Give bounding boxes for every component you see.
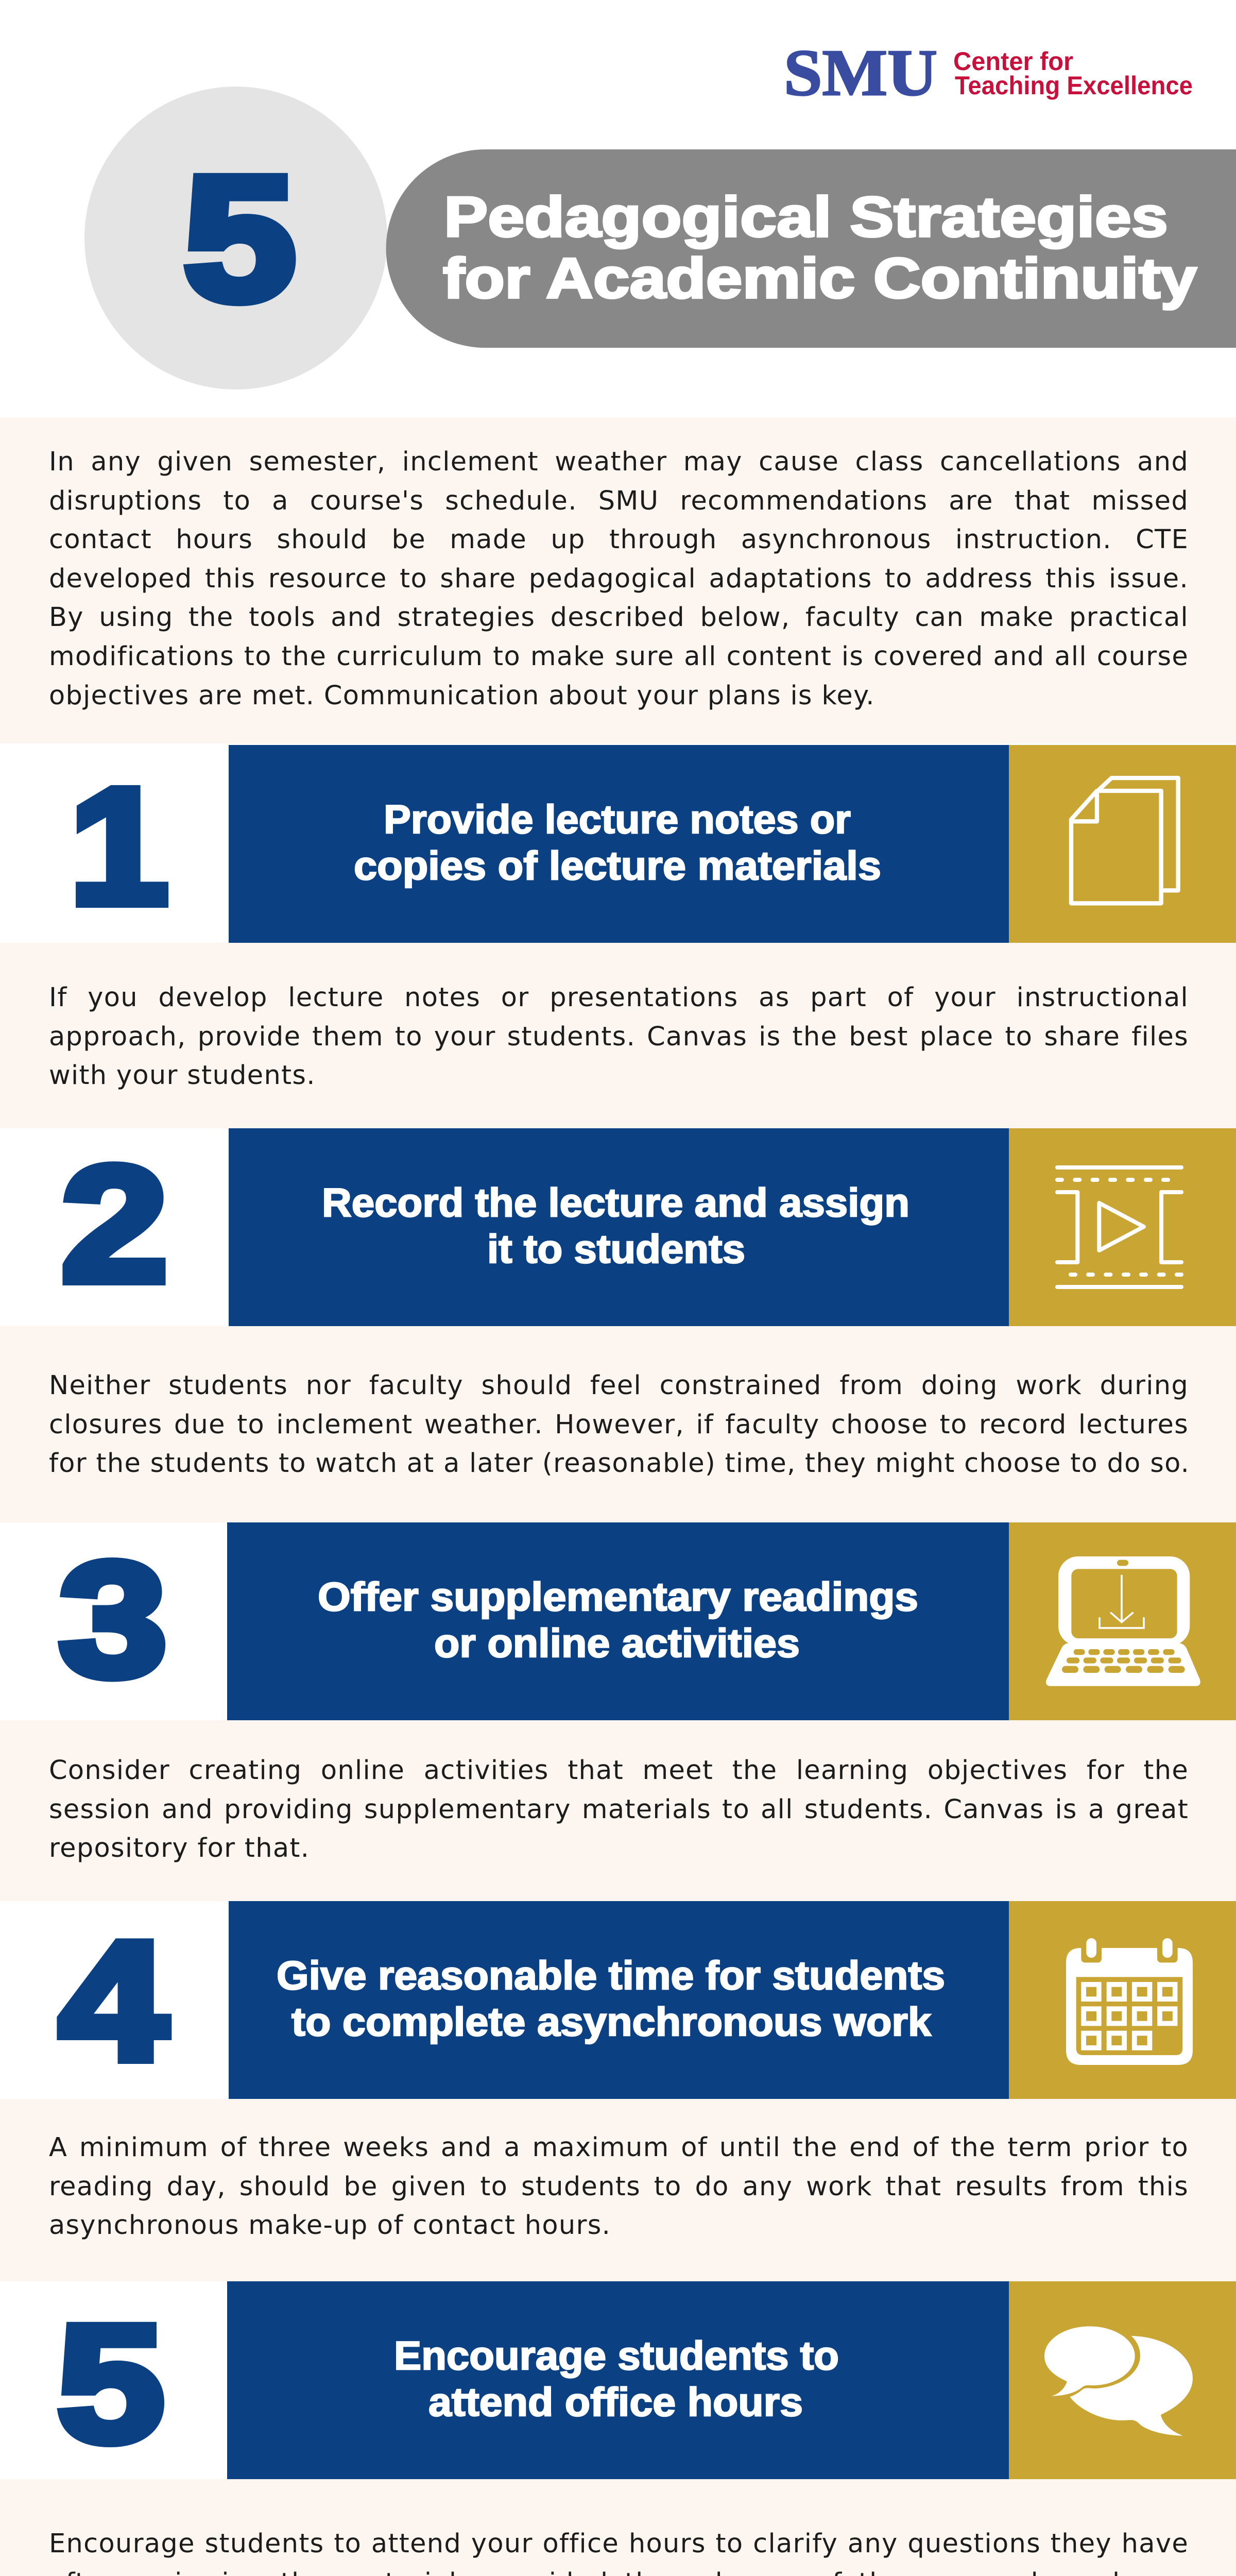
panel: strategy 5 text: Encourage students to attend your office hours to clarify any questions they have [49,2529,1189,2559]
icon: calendar [1066,1938,1193,2065]
panel: strategy 1 text: If you develop lecture notes or presentations as part of your instructional [49,982,1189,1013]
heading 3 [318,1574,918,1666]
panel: strategy 1 text: approach, provide them to your students. Canvas is the best place to share files [49,1022,1189,1052]
panel: strategy 2 text: closures due to inclement weather. However, if faculty choose to record lectures [49,1410,1189,1440]
panel: strategy 5 text [0,2479,1236,2576]
intro text: disruptions to a course's schedule. SMU recommendations are that missed [49,486,1189,516]
number 4: 4 [59,1906,168,2095]
heading 2 [322,1180,909,1272]
panel: strategy 2 text: Neither students nor faculty should feel constrained from doing work during [49,1370,1189,1401]
heading 4 [277,1953,945,2044]
heading 2: Record the lecture and assign [322,1180,909,1225]
heading 1 [354,796,881,888]
heading 3: or online activities [434,1620,800,1666]
heading 4: Give reasonable time for students [277,1953,945,1998]
panel: strategy 1 text: with your students. [49,1060,316,1091]
heading 5: Encourage students to [394,2333,839,2378]
logo: SMU Center for Teaching Excellence [784,36,1193,109]
panel: strategy 4 text [0,2099,1236,2281]
header [84,36,1236,389]
number circle: 5 [184,140,296,337]
panel: introduction [0,417,1236,743]
panel: strategy 3 text: Consider creating online activities that meet the learning objectives for the [49,1755,1189,1786]
title pill [386,149,1236,348]
strategy 2 header [61,1128,1236,1326]
panel: strategy 2 text [0,1326,1236,1522]
number 3: 3 [59,1529,167,1710]
logo: SMU Center for Teaching Excellence: Center for [953,47,1073,76]
heading 1: copies of lecture materials [354,843,881,888]
heading 3: Offer supplementary readings [318,1574,918,1619]
panel: strategy 4 text: reading day, should be given to students to do any work that results from this [49,2172,1189,2202]
panel: strategy 3 text [0,1720,1236,1901]
panel: strategy 4 text: asynchronous make-up of contact hours. [49,2210,611,2241]
panel: strategy 3 text: repository for that. [49,1833,310,1863]
heading 5: attend office hours [428,2379,803,2425]
panel: strategy 1 text [0,943,1236,1128]
title pill: Pedagogical Strategies [444,185,1168,249]
heading 1: Provide lecture notes or [384,796,851,842]
strategy 1 header [70,745,1236,943]
logo: SMU Center for Teaching Excellence: SMU [784,36,937,109]
panel: strategy 3 text: session and providing supplementary materials to all students. Canvas is a great [49,1794,1189,1825]
intro text [49,447,1189,711]
strategy 3 header [58,1522,1236,1720]
intro text: By using the tools and strategies described below, faculty can make practical [49,602,1189,633]
icon: laptop with download [1046,1556,1200,1686]
intro text: developed this resource to share pedagogical adaptations to address this issue. [49,564,1189,594]
panel: strategy 4 text: A minimum of three weeks and a maximum of until the end of the term prior to [49,2132,1189,2163]
intro text: modifications to the curriculum to make sure all content is covered and all course [49,641,1189,672]
strategy 5 header [57,2281,1236,2479]
intro text: objectives are met. Communication about your plans is key. [49,681,875,711]
number 5: 5 [57,2291,164,2477]
number 1: 1 [70,754,168,938]
intro text: In any given semester, inclement weather may cause class cancellations and [49,447,1189,477]
icon: film strip with play [1057,1167,1181,1287]
title pill: for Academic Continuity [443,247,1197,310]
logo: SMU Center for Teaching Excellence: Teaching Excellence [955,71,1193,100]
heading 4: to complete asynchronous work [291,1999,932,2044]
strategy 4 header [57,1901,1236,2099]
panel: strategy 2 text: for the students to watch at a later (reasonable) time, they might choose to do so. [49,1448,1190,1479]
icon: speech bubbles [1044,2326,1193,2436]
heading 2: it to students [487,1226,745,1272]
number 2: 2 [61,1132,168,1316]
number circle [84,87,387,389]
heading 5 [394,2333,839,2425]
intro text: contact hours should be made up through asynchronous instruction. CTE [49,524,1189,555]
icon: documents [1071,778,1178,903]
